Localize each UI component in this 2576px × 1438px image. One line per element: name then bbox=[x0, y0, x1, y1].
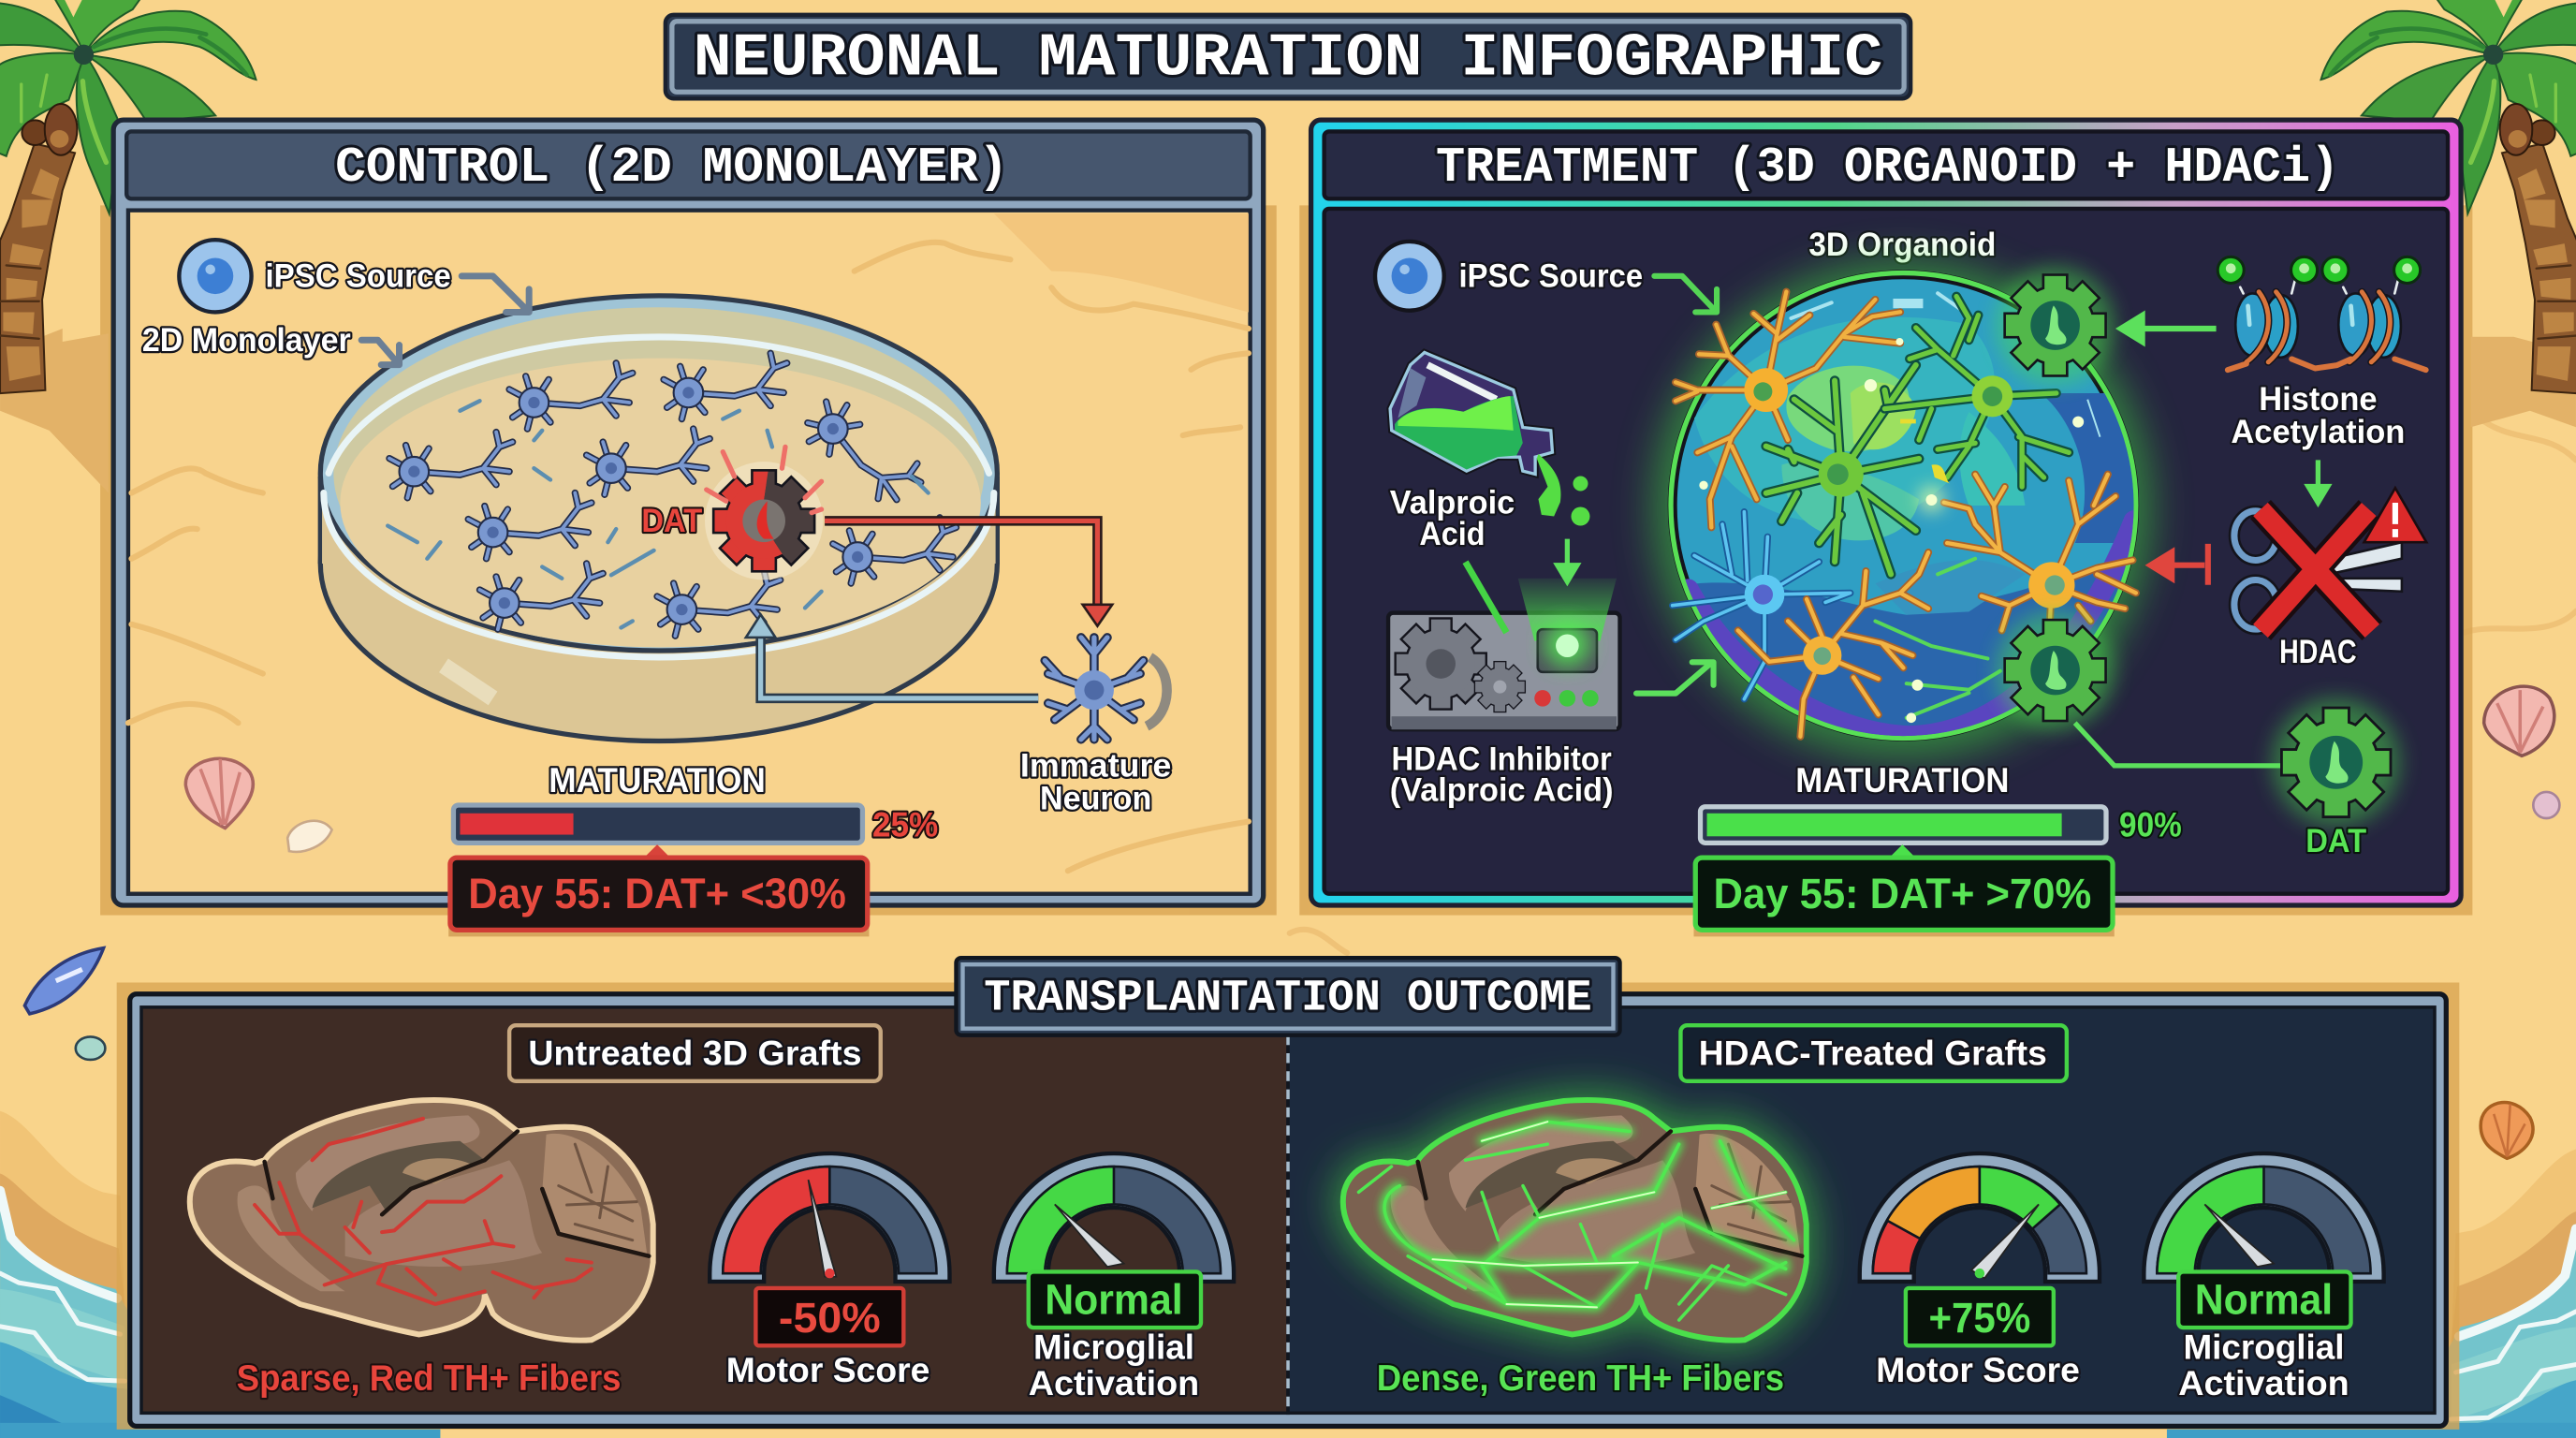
label: ipsc source: iPSC Source bbox=[265, 257, 451, 294]
label: valproic acid: Acid bbox=[1419, 516, 1486, 552]
dish neurons bbox=[389, 353, 956, 636]
icon: histone nucleosomes bbox=[2217, 257, 2426, 370]
arrow: gear to immature neuron bbox=[825, 521, 1112, 626]
label: histone acetylation bbox=[2231, 381, 2405, 450]
gauge: motor score untreated bbox=[710, 1153, 949, 1282]
label: microglial untreated: Activation bbox=[1029, 1364, 1199, 1402]
caption: dense fibers: Dense, Green TH+ Fibers bbox=[1377, 1358, 1784, 1399]
panel: transplantation outcome bbox=[130, 958, 2446, 1426]
arrow: acid to machine bbox=[1558, 539, 1577, 581]
gauge: motor score treated bbox=[1860, 1153, 2100, 1282]
gauge: microglia treated bbox=[2144, 1153, 2384, 1282]
value: normal treated: Normal bbox=[2195, 1276, 2333, 1324]
label: HDAC: HDAC bbox=[2279, 634, 2357, 670]
palm shadow right bbox=[2471, 337, 2576, 427]
icon: beach shells right bbox=[2481, 686, 2559, 1158]
red sparks bbox=[707, 447, 822, 513]
title banner: NEURONAL MATURATION INFOGRAPHIC bbox=[694, 25, 1882, 94]
badge: treated grafts bbox=[1680, 1025, 2067, 1081]
gauge: microglia untreated bbox=[994, 1153, 1234, 1282]
icon: seashells in panel bbox=[185, 758, 332, 852]
brain: sparse fibers bbox=[190, 1100, 653, 1341]
cell debris bbox=[388, 401, 929, 627]
arrow: machine to organoid bbox=[1636, 662, 1714, 694]
right half navy bbox=[1288, 1007, 2435, 1413]
label: motor score untreated: Motor Score bbox=[726, 1351, 929, 1389]
petri dish bbox=[320, 296, 997, 741]
transplantation heading bbox=[956, 958, 1620, 1035]
label: microglial treated: Activation bbox=[2178, 1364, 2349, 1402]
icon: beach shells left bbox=[24, 948, 105, 1060]
label: microglial treated: Microglial bbox=[2183, 1328, 2344, 1367]
arrow: immature neuron back to gear bbox=[746, 614, 1038, 698]
maturation gauge treatment bbox=[1701, 761, 2182, 844]
background: dune ripples bbox=[1290, 419, 2576, 953]
value: minus 50: -50% bbox=[779, 1294, 881, 1342]
label: immature neuron bbox=[1020, 747, 1171, 816]
palm shadow left bbox=[0, 329, 109, 493]
maturation gauge treatment: 90% bbox=[2119, 806, 2182, 844]
organoid somas bbox=[1744, 368, 2075, 675]
left half brown bbox=[141, 1007, 1288, 1413]
bright sparks bbox=[1699, 338, 2084, 723]
callout: treatment result bbox=[1693, 844, 2115, 936]
label: ipsc source treatment: iPSC Source bbox=[1459, 257, 1643, 294]
bottom water strip bbox=[0, 1423, 2576, 1438]
control heading: CONTROL (2D MONOLAYER) bbox=[335, 139, 1009, 196]
icon: organoid gears bbox=[1996, 266, 2115, 729]
badge: treated grafts: HDAC-Treated Grafts bbox=[1699, 1034, 2047, 1072]
icon: broken red DAT gear bbox=[705, 462, 823, 580]
treatment heading bbox=[1325, 131, 2448, 198]
maturation gauge control bbox=[453, 761, 938, 844]
arrow: HDAC inhibition bbox=[2150, 544, 2208, 585]
label: valproic acid bbox=[1390, 485, 1515, 552]
badge: untreated grafts bbox=[509, 1025, 881, 1081]
arrow: monolayer to dish bbox=[361, 340, 400, 365]
icon: HDAC inhibitor machine bbox=[1388, 562, 1620, 729]
label: immature neuron: Neuron bbox=[1040, 780, 1151, 816]
icon: ipsc source treatment bbox=[1375, 242, 1444, 311]
maturation gauge treatment: MATURATION bbox=[1795, 761, 2009, 800]
value: plus 75 bbox=[1906, 1288, 2054, 1345]
label: motor score treated: Motor Score bbox=[1876, 1351, 2080, 1389]
label: 2d monolayer: 2D Monolayer bbox=[142, 322, 351, 359]
value: minus 50 bbox=[755, 1288, 903, 1345]
arrow: histone to HDAC bbox=[2308, 460, 2328, 503]
control heading bbox=[126, 131, 1251, 198]
palm tree left bbox=[0, 0, 256, 393]
label: DAT green: DAT bbox=[2305, 823, 2367, 859]
background: ocean left bbox=[0, 1111, 128, 1438]
label: 3d organoid: 3D Organoid bbox=[1808, 227, 1996, 263]
label: HDAC inhibitor: HDAC Inhibitor bbox=[1392, 741, 1612, 777]
caption: sparse fibers: Sparse, Red TH+ Fibers bbox=[237, 1358, 621, 1399]
organoid bbox=[1653, 259, 2152, 759]
value: plus 75: +75% bbox=[1928, 1294, 2030, 1342]
treatment dark field bbox=[1325, 209, 2448, 894]
palm tree right bbox=[2321, 0, 2576, 393]
value: normal untreated: Normal bbox=[1045, 1276, 1183, 1324]
arrow: ipsc to dish bbox=[461, 276, 529, 312]
maturation gauge control: 25% bbox=[872, 806, 938, 844]
label: DAT red: DAT bbox=[641, 503, 703, 539]
maturation gauge control: MATURATION bbox=[549, 761, 766, 800]
icon: valproic acid bottle bbox=[1390, 352, 1589, 526]
panel: treatment bbox=[1311, 120, 2461, 936]
panel shadows bbox=[100, 205, 2472, 1430]
icon: immature neuron bbox=[1045, 638, 1167, 740]
badge: untreated grafts: Untreated 3D Grafts bbox=[528, 1034, 862, 1072]
panel: control bbox=[113, 120, 1264, 936]
label: HDAC inhibitor: (Valproic Acid) bbox=[1390, 772, 1613, 809]
icon: crossed scissors HDAC bbox=[2234, 488, 2426, 631]
arrow: ipsc to organoid bbox=[1654, 276, 1717, 312]
connector: gear to DAT bbox=[2075, 723, 2280, 766]
label: histone acetylation: Acetylation bbox=[2231, 414, 2405, 450]
callout: treatment result: Day 55: DAT+ >70% bbox=[1714, 870, 2091, 917]
brain: dense fibers bbox=[1343, 1100, 1807, 1341]
label: microglial untreated bbox=[1029, 1328, 1199, 1402]
label: microglial untreated: Microglial bbox=[1033, 1328, 1194, 1367]
label: histone acetylation: Histone bbox=[2259, 381, 2378, 418]
background: ocean right bbox=[2448, 1149, 2576, 1438]
label: HDAC inhibitor bbox=[1390, 741, 1613, 809]
callout: control result bbox=[448, 844, 869, 936]
control sand field bbox=[128, 211, 1251, 894]
transplantation heading: TRANSPLANTATION OUTCOME bbox=[984, 975, 1592, 1024]
icon: DAT gear bright bbox=[2272, 698, 2400, 827]
arrow: histone to gear bbox=[2121, 315, 2217, 342]
icon: ipsc source bbox=[179, 240, 252, 312]
label: immature neuron: Immature bbox=[1020, 747, 1171, 784]
label: valproic acid: Valproic bbox=[1390, 485, 1515, 521]
label: microglial treated bbox=[2178, 1328, 2349, 1402]
callout: control result: Day 55: DAT+ <30% bbox=[468, 870, 846, 917]
treatment heading: TREATMENT (3D ORGANOID + HDACi) bbox=[1436, 139, 2339, 196]
organoid neurons bbox=[1673, 292, 2136, 737]
